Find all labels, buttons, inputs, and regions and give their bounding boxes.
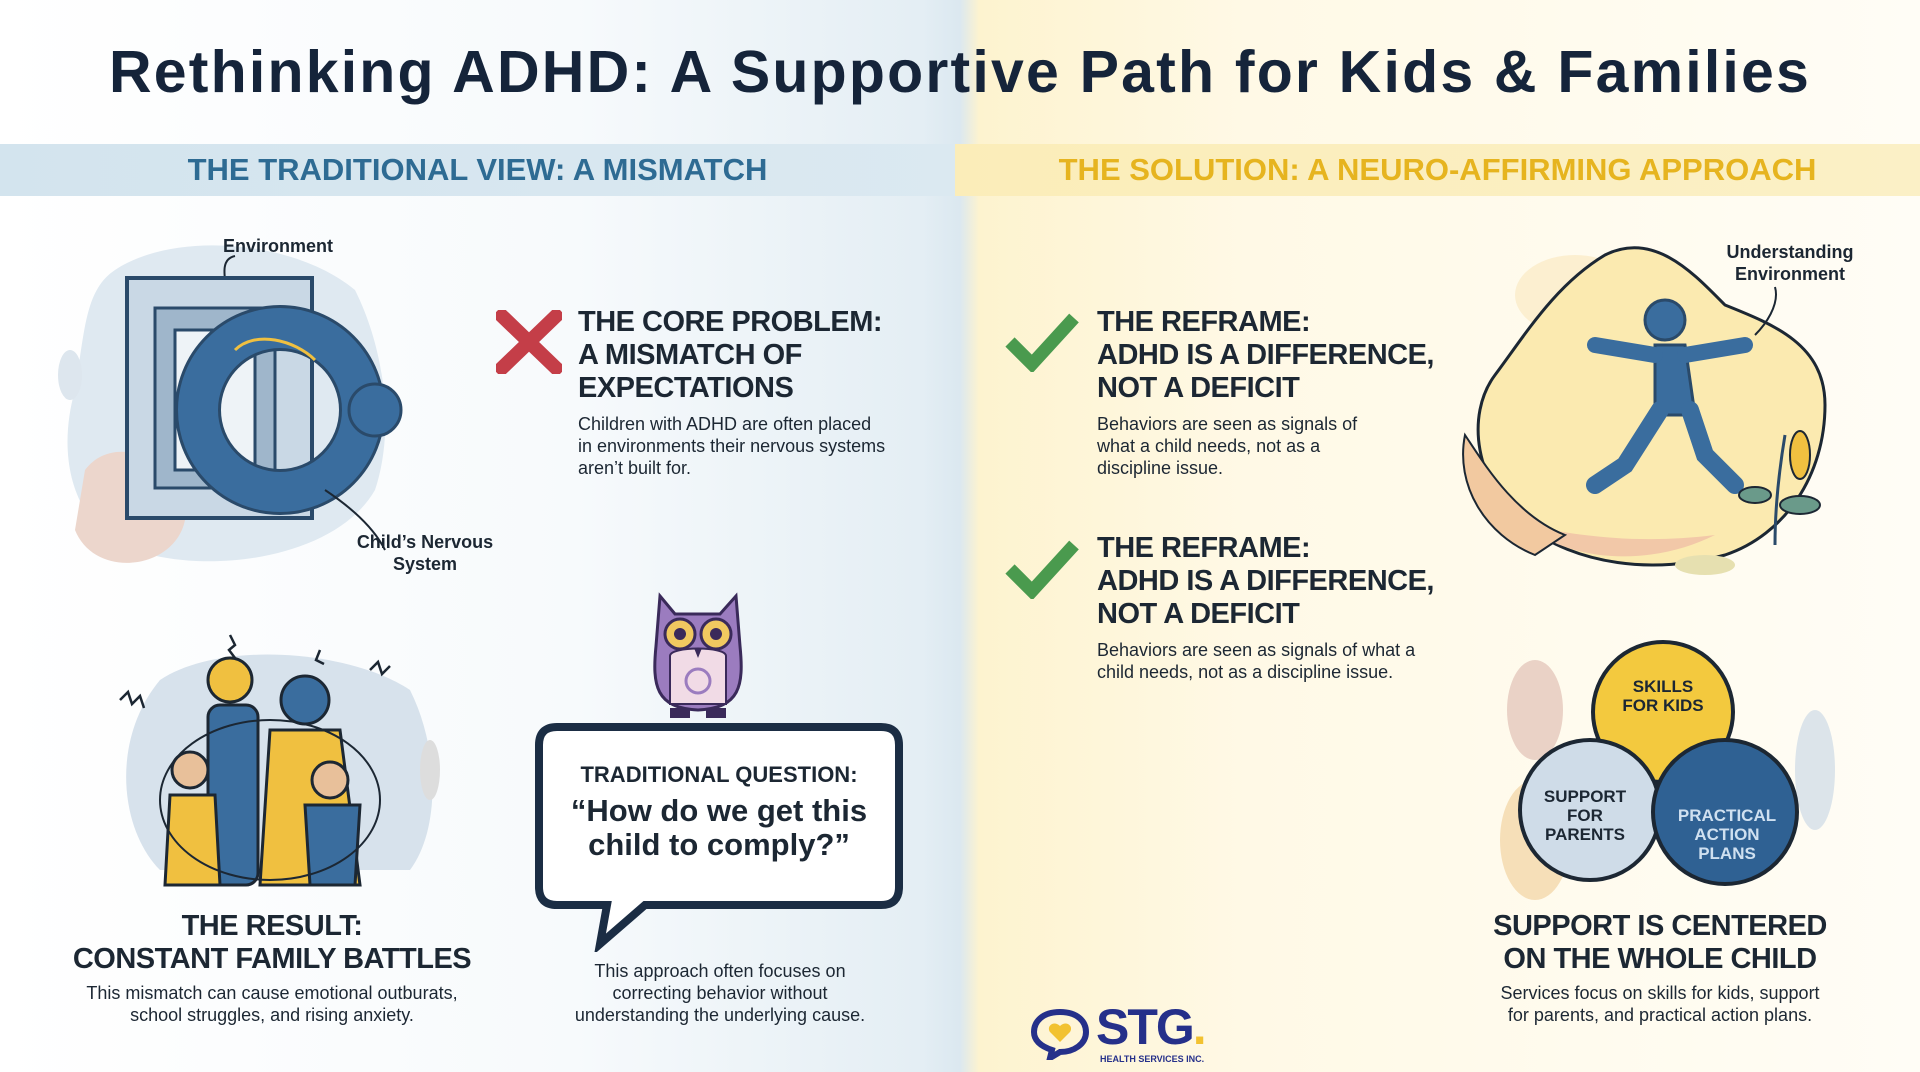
- caption: traditional approach: [575, 961, 865, 1025]
- text block: core problem: EXPECTATIONS: [578, 372, 793, 404]
- text block: core problem: [578, 306, 885, 478]
- logo: STG Health Services: HEALTH SERVICES INC.: [1100, 1054, 1204, 1064]
- text block: core problem: aren’t built for.: [578, 458, 691, 478]
- text block: result: This mismatch can cause emotional outburats,: [86, 983, 458, 1003]
- text block: reframe 2: Behaviors are seen as signals of what a child needs, not as a discipline issue.: [1097, 640, 1415, 682]
- icon: check 2: [1006, 540, 1079, 599]
- text block: core problem: THE CORE PROBLEM:: [578, 306, 882, 338]
- venn diagram: whole child support: [1500, 640, 1835, 900]
- illustration: family battles: [119, 634, 440, 886]
- text block: reframe 1: Behaviors are seen as signals of what a child needs, not as a discipline issue.: [1097, 414, 1357, 478]
- right band header: THE SOLUTION: A NEURO-AFFIRMING APPROACH: [1059, 152, 1816, 187]
- venn diagram: whole child support: ACTION: [1694, 825, 1760, 844]
- text block: result: school struggles, and rising anxiety.: [130, 1005, 414, 1025]
- text block: whole child: for parents, and practical action plans.: [1508, 1005, 1812, 1025]
- illustration: mismatch environment: Environment: [223, 236, 333, 256]
- text block: reframe 1: THE REFRAME:: [1097, 306, 1310, 338]
- venn diagram: whole child support: FOR KIDS: [1622, 696, 1704, 715]
- illustration: understanding environment: Understanding: [1726, 242, 1854, 262]
- illustration: mismatch environment: Child’s Nervous: [357, 532, 493, 552]
- text block: whole child: SUPPORT IS CENTERED: [1493, 910, 1827, 942]
- illustration: understanding environment: Environment: [1735, 264, 1845, 284]
- text block: result: THE RESULT:: [182, 910, 362, 942]
- left band header: THE TRADITIONAL VIEW: A MISMATCH: [188, 152, 767, 187]
- logo: STG Health Services: STG.: [1096, 999, 1205, 1055]
- text block: result: CONSTANT FAMILY BATTLES: [73, 943, 471, 975]
- text block: whole child: Services focus on skills for kids, support: [1500, 983, 1820, 1003]
- speech bubble: traditional question: TRADITIONAL QUESTION:: [580, 762, 858, 787]
- venn diagram: whole child support: FOR: [1567, 806, 1603, 825]
- text block: reframe 1: NOT A DEFICIT: [1097, 372, 1299, 404]
- venn diagram: whole child support: SUPPORT: [1544, 787, 1627, 806]
- text block: reframe 1: [1097, 306, 1434, 478]
- text block: result: [73, 910, 471, 1025]
- text block: reframe 2: [1097, 532, 1434, 682]
- text block: reframe 2: ADHD IS A DIFFERENCE,: [1097, 565, 1434, 597]
- right band header: [955, 144, 1920, 196]
- speech bubble: traditional question: child to comply?”: [588, 827, 850, 862]
- logo: STG Health Services: [1031, 999, 1205, 1064]
- icon: red X: [496, 310, 562, 374]
- caption: traditional approach: This approach often focuses on: [594, 961, 846, 981]
- title: Rethinking ADHD: A Supportive Path for Kids & Families: [109, 39, 1811, 105]
- venn diagram: whole child support: PLANS: [1698, 844, 1756, 863]
- text block: core problem: in environments their nervous systems: [578, 436, 885, 456]
- illustration: understanding environment: [1462, 242, 1854, 575]
- caption: traditional approach: understanding the underlying cause.: [575, 1005, 865, 1025]
- icon: check 1: [1006, 314, 1079, 372]
- text block: reframe 2: NOT A DEFICIT: [1097, 598, 1299, 630]
- speech bubble: traditional question: “How do we get this: [571, 793, 867, 828]
- venn diagram: whole child support: PARENTS: [1545, 825, 1625, 844]
- illustration: mismatch environment: System: [393, 554, 457, 574]
- left band header: [0, 144, 955, 196]
- text block: core problem: A MISMATCH OF: [578, 339, 802, 371]
- icon: owl: [653, 592, 743, 718]
- text block: reframe 1: ADHD IS A DIFFERENCE,: [1097, 339, 1434, 371]
- venn diagram: whole child support: PRACTICAL: [1678, 806, 1776, 825]
- illustration: mismatch environment: [58, 236, 493, 574]
- text block: whole child: [1493, 910, 1827, 1025]
- text block: reframe 2: THE REFRAME:: [1097, 532, 1310, 564]
- caption: traditional approach: correcting behavior without: [612, 983, 828, 1003]
- venn diagram: whole child support: SKILLS: [1633, 677, 1693, 696]
- text block: whole child: ON THE WHOLE CHILD: [1503, 943, 1817, 975]
- text block: core problem: Children with ADHD are often placed: [578, 414, 871, 434]
- speech bubble: traditional question: [535, 723, 903, 952]
